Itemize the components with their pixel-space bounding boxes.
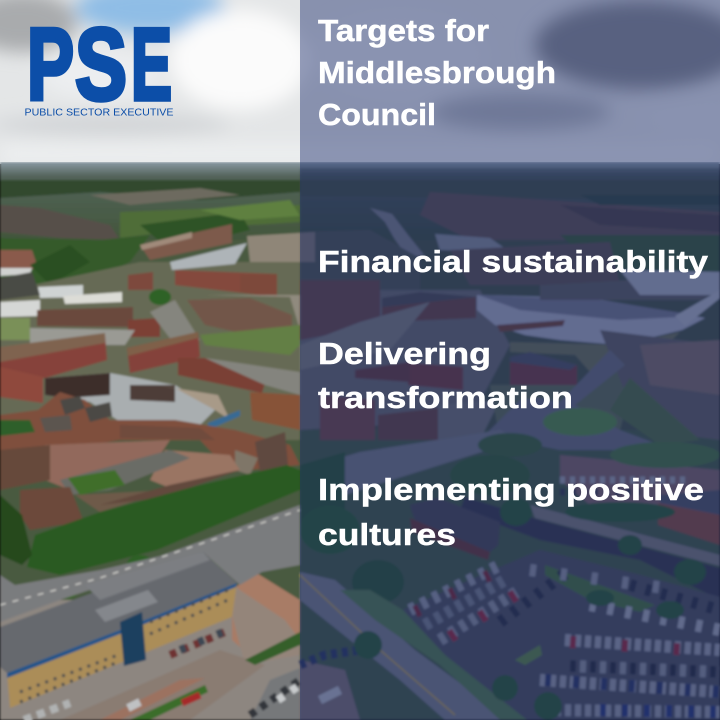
upper road and trees right: [300, 430, 720, 554]
diagonal road right: [300, 572, 510, 720]
target: implementing positive cultures: cultures: [318, 517, 456, 552]
right side docks buildings and river: [300, 270, 720, 450]
courtyards and low housing: [0, 440, 240, 530]
target: delivering transformation: Delivering: [318, 336, 491, 371]
logo strapline: PUBLIC SECTOR EXECUTIVE: [24, 106, 174, 118]
translucent navy overlay panel: [300, 0, 720, 720]
cars on forecourt: [24, 630, 300, 720]
gabled brick buildings: [0, 392, 300, 475]
title: Targets for: [318, 13, 489, 48]
title: Middlesbrough: [318, 55, 556, 90]
logo letters PSE: [27, 8, 172, 122]
land darkening on right side: [300, 168, 720, 720]
title: Council: [318, 97, 436, 132]
trees along car park: [354, 535, 706, 720]
target: implementing positive cultures: [318, 472, 704, 552]
scene details softened: [0, 162, 720, 720]
logo letters PSE: P: [27, 8, 74, 122]
left district ground: [0, 262, 300, 440]
main office building: [0, 552, 237, 708]
PSE logo: [24, 8, 174, 122]
main car park: [403, 550, 720, 720]
sky with clouds: [0, 0, 720, 164]
target: financial sustainability: Financial sustainability: [318, 244, 709, 279]
dual carriageway: [0, 505, 300, 622]
left canal basin and warehouses: [0, 224, 315, 430]
canal and office building right: [352, 490, 720, 604]
target: delivering transformation: [318, 336, 573, 415]
logo letters PSE: S: [75, 8, 127, 122]
title: [318, 13, 556, 132]
green verge by parking: [340, 590, 527, 720]
logo letters PSE: E: [131, 8, 172, 122]
tree belt: [0, 465, 300, 614]
right side lower ground: [300, 430, 720, 720]
target: implementing positive cultures: Implementing positive: [318, 472, 704, 507]
target: delivering transformation: transformation: [318, 380, 573, 415]
red forecourt and paving: [0, 572, 300, 720]
rows of parked cars: [300, 480, 720, 712]
distant landscape: [0, 162, 720, 720]
